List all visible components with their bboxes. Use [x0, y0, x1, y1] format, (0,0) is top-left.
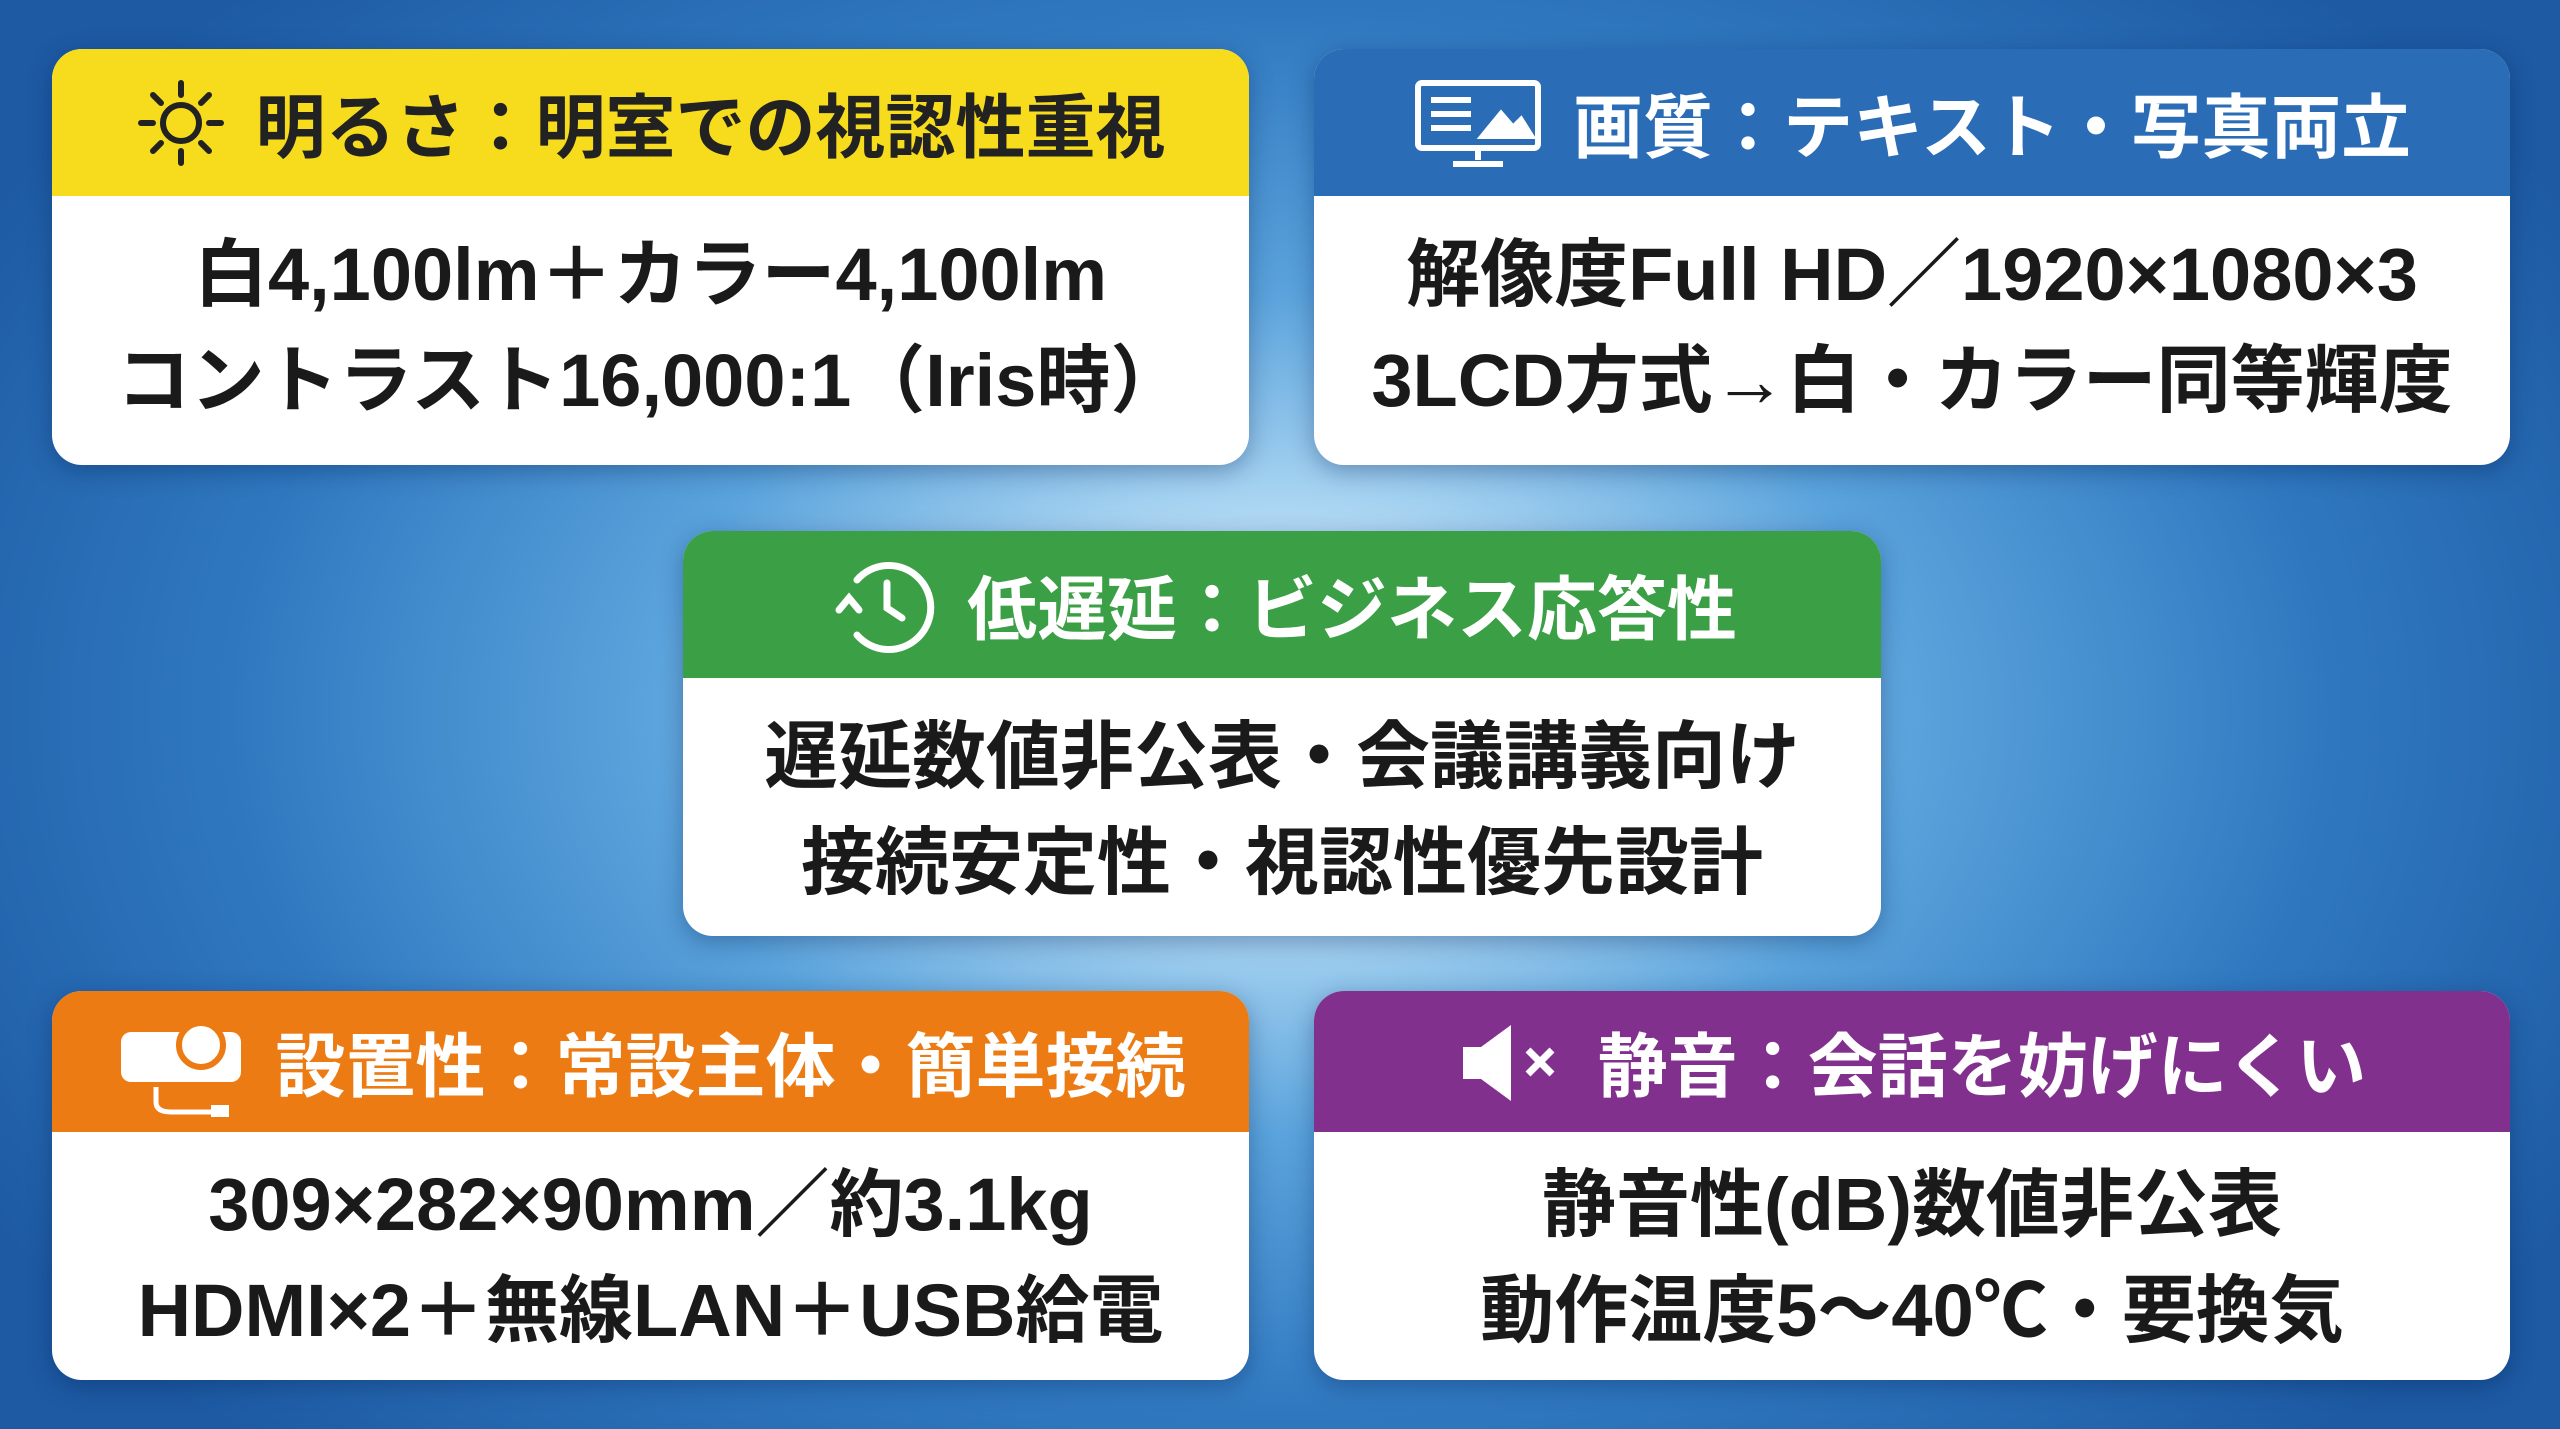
- icon: monitor: [1415, 80, 1541, 167]
- text: brightness specs: [117, 233, 1184, 422]
- panel: installation: [52, 991, 1249, 1380]
- panel: noise: [1314, 991, 2510, 1380]
- panel: latency: [683, 531, 1881, 936]
- text: installation specs: [138, 1163, 1163, 1352]
- icon: clock: [836, 562, 934, 653]
- text: brightness specs: 白4,100lm＋カラー4,100lm: [194, 233, 1107, 316]
- heading: noise: 静音：会話を妨げにくい: [1598, 1028, 2366, 1106]
- text: noise specs: [1480, 1163, 2344, 1352]
- heading: installation: [52, 991, 1249, 1132]
- heading: latency: 低遅延：ビジネス応答性: [967, 571, 1737, 649]
- panel: brightness: [52, 49, 1249, 465]
- text: image quality specs: 3LCD方式→白・カラー同等輝度: [1371, 339, 2453, 422]
- text: noise specs: 静音性(dB)数値非公表: [1542, 1163, 2282, 1246]
- text: installation specs: HDMI×2＋無線LAN＋USB給電: [138, 1269, 1163, 1352]
- icon: projector: [121, 1026, 241, 1117]
- text: latency specs: 遅延数値非公表・会議講義向け: [764, 715, 1800, 798]
- text: brightness specs: コントラスト16,000:1（Iris時）: [117, 339, 1184, 422]
- heading: brightness: [52, 49, 1249, 196]
- text: latency specs: [764, 715, 1800, 904]
- heading: installation: 設置性：常設主体・簡単接続: [276, 1028, 1186, 1106]
- icon: muted speaker: [1463, 1025, 1554, 1101]
- text: latency specs: 接続安定性・視認性優先設計: [801, 821, 1763, 904]
- text: noise specs: 動作温度5～40℃・要換気: [1480, 1269, 2344, 1352]
- text: installation specs: 309×282×90mm／約3.1kg: [208, 1163, 1093, 1246]
- heading: image quality: [1314, 49, 2510, 196]
- text: image quality specs: [1371, 233, 2453, 422]
- heading: latency: [683, 531, 1881, 678]
- icon: sun: [138, 80, 224, 166]
- heading: brightness: 明るさ：明室での視認性重視: [256, 89, 1166, 167]
- heading: noise: [1314, 991, 2510, 1132]
- heading: image quality: 画質：テキスト・写真両立: [1573, 89, 2411, 167]
- panel: image quality: [1314, 49, 2510, 465]
- text: image quality specs: 解像度Full HD／1920×1080×3: [1406, 233, 2418, 316]
